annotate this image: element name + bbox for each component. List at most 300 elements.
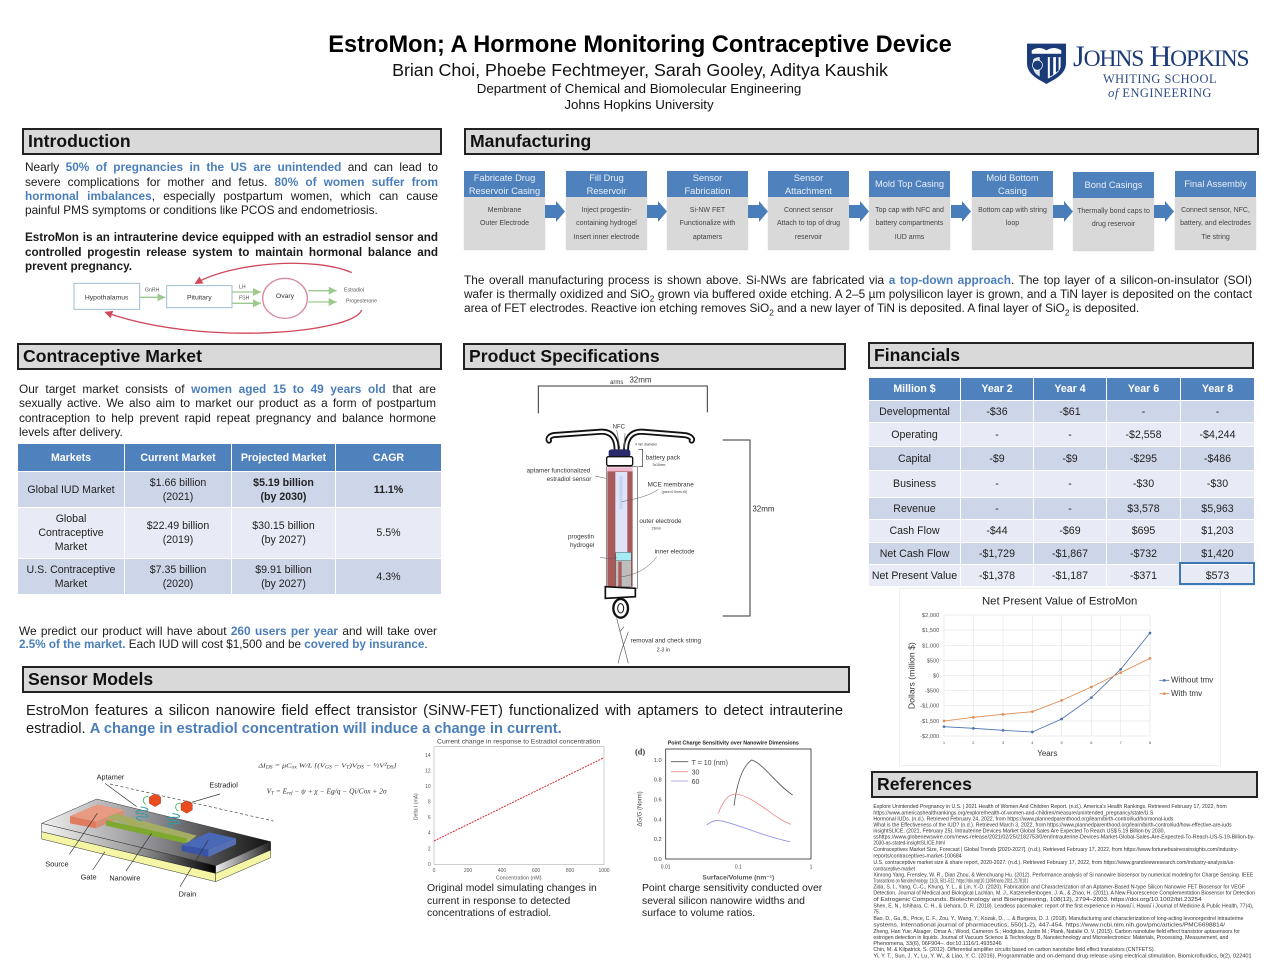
equations: T xyxy=(346,766,350,771)
market table: Global xyxy=(56,513,86,525)
heading: contraceptive market xyxy=(17,343,442,370)
diagram: IUD device: 4 mm diameter xyxy=(635,443,658,447)
financial table: - xyxy=(1216,406,1219,418)
step 6: Casing xyxy=(998,186,1027,196)
market table: CAGR xyxy=(373,452,404,464)
financial table: Net Cash Flow xyxy=(880,548,949,560)
market table: 11.1% xyxy=(374,484,403,496)
line chart: net present value: 1 xyxy=(943,740,946,745)
line chart: net present value: $500 xyxy=(927,658,939,664)
equations: DS xyxy=(265,766,273,771)
financial table: $1,420 xyxy=(1201,548,1234,560)
financial table: -$30 xyxy=(1133,478,1154,490)
chart: hormone feedback diagram: Hypothalamus xyxy=(85,294,129,301)
diagram: IUD device: NFC xyxy=(613,424,626,430)
text block: introduction paragraph: painful PMS symptoms or conditions like PCOS and endometriosis. xyxy=(25,203,378,217)
step 4: Attach to top of drug xyxy=(777,220,840,227)
heading: manufacturing: Manufacturing xyxy=(470,131,591,151)
text block: reference list xyxy=(873,804,1255,959)
diagram: IUD device: 3x10mm xyxy=(653,463,666,467)
step 4 xyxy=(767,171,850,250)
diagram: IUD device: outer electrode xyxy=(639,518,682,525)
financial table: - xyxy=(1142,406,1145,418)
diagram: nanowire FET: Drain xyxy=(179,890,196,899)
line chart: net present value: Without tmv xyxy=(1171,676,1213,685)
text block: target market: Our target market consists of women aged 15 to 49 years old that are xyxy=(19,382,436,396)
diagram: nanowire FET: Estradiol xyxy=(209,780,238,789)
arrow xyxy=(647,201,667,222)
caption: model chart: Original model simulating changes in xyxy=(427,883,597,894)
icon: university shield xyxy=(1027,44,1066,84)
market table: (2021) xyxy=(163,490,193,502)
line chart: current change vs concentration: Current change in response to Estradiol concentration xyxy=(437,739,600,746)
financial table: $695 xyxy=(1132,525,1155,537)
line chart: current change vs concentration: 200 xyxy=(464,868,472,874)
market table: (by 2030) xyxy=(261,490,306,502)
text block: market prediction: 2.5% of the market. Each IUD will cost $1,500 and be covered by insurance. xyxy=(19,638,428,651)
line chart: current change vs concentration: 8 xyxy=(428,799,431,805)
line chart: net present value: 7 xyxy=(1120,740,1123,745)
text block: introduction paragraph: hormonal imbalances, especially postpartum women, which can cause xyxy=(25,189,438,203)
financial table: Cash Flow xyxy=(889,525,940,537)
step 8: Tie string xyxy=(1201,234,1230,241)
arrow xyxy=(849,201,869,222)
callout: final NPV highlight xyxy=(1179,562,1255,585)
diagram: IUD device: battery pack xyxy=(646,454,681,461)
line chart: point charge sensitivity xyxy=(635,740,813,882)
text block: target market xyxy=(19,382,436,438)
financial table: -$30 xyxy=(1207,478,1228,490)
financial table: -$44 xyxy=(986,525,1008,537)
financial table: -$4,244 xyxy=(1200,428,1235,440)
panel: manufacturing xyxy=(464,128,1259,317)
heading: introduction: Introduction xyxy=(28,131,131,151)
text block: reference list: Bao, D., Gu, B., Price, C. F., Zou, Y., Wang, Y., Kozak, D., ... & Burgess, D. J. (2018). Manufacturing and characterization of long-acting levonorgestrel intrauterine xyxy=(873,916,1243,922)
line chart: point charge sensitivity: Surface/Volume (nm⁻¹) xyxy=(702,875,774,882)
logo: Johns Hopkins Whiting School of Engineering xyxy=(1027,40,1248,100)
line chart: point charge sensitivity: 30 xyxy=(692,769,700,776)
financial table: -$1,867 xyxy=(1052,548,1088,560)
caption: model chart: current in response to detected xyxy=(427,896,570,907)
text block: reference list: Phenomena, 33(6), 06F904–. doi:10.1116/1.4935246 xyxy=(873,941,1002,947)
step 1: Reservoir Casing xyxy=(469,186,540,196)
diagram: IUD device: progestin xyxy=(568,534,595,541)
line chart: current change vs concentration: Concentration (nM) xyxy=(496,876,542,882)
text block: reference list: Transactions on Nanotechnology, 11(3), 501–512. https://doi.org/10.1109/tnano.2011.2178101 xyxy=(873,879,1028,885)
text block: reference list: 75. xyxy=(873,909,880,915)
text block: device summary: prevent pregnancy. xyxy=(25,260,132,273)
arrow xyxy=(748,201,768,222)
financial table: -$732 xyxy=(1130,548,1157,560)
financial table: -$371 xyxy=(1130,570,1157,582)
financial table: Net Present Value xyxy=(872,570,957,582)
text block: reference list: Zheng, Han Yue; Alsager, Omar A.; Wood, Cameron S.; Hodgkiss, Justin M.; Plank, Natalie O. V. (2015). Carbon nanotube field effect transistor aptasensors for xyxy=(873,929,1240,935)
market table: (by 2027) xyxy=(261,534,306,546)
affiliation: Department of Chemical and Biomolecular Engineering xyxy=(477,80,801,96)
financial table: $573 xyxy=(1206,570,1229,582)
diagram: IUD device: hydrogel xyxy=(570,542,594,549)
panel: contraceptive market xyxy=(17,343,442,651)
line chart: point charge sensitivity: 1 xyxy=(810,865,813,871)
equations: ΔI xyxy=(258,763,264,770)
diagram: IUD device: aptamer functionalized xyxy=(527,468,591,475)
text block: reference list: Contraceptives Market Size, Forecast | Global Trends [2020-2027]. (n.d.). Retrieved February 17, 2022, from https://www.fortunebusinessinsights.com/industry- xyxy=(873,847,1239,853)
step 1: Outer Electrode xyxy=(480,220,529,227)
text block: reference list: systems. International journal of pharmaceutics, 550(1-2), 447-454. https://www.ncbi.nlm.nih.gov/pmc/articles/PMC6698814/ xyxy=(873,922,1226,928)
text block: sensor description: estradiol. A change in estradiol concentration will induce a change in current. xyxy=(26,721,562,737)
panel: sensor models: Delta I (mA) xyxy=(413,793,419,820)
market table: $22.49 billion xyxy=(147,520,209,532)
chart: hormone feedback diagram: Pituitary xyxy=(187,294,212,301)
market table: $7.35 billion xyxy=(150,564,206,576)
authors: Brian Choi, Phoebe Fechtmeyer, Sarah Gooley, Aditya Kaushik xyxy=(392,60,888,80)
financial table: - xyxy=(995,502,999,514)
line chart: point charge sensitivity: 0.1 xyxy=(735,865,742,871)
line chart: current change vs concentration: 4 xyxy=(428,831,431,837)
text block: reference list: estrogen detection in liquids. Journal of Vacuum Science & Technology B, Nanotechnology and Microelectronics: Materials, Processing, Measurement, and xyxy=(873,935,1228,941)
heading: financials xyxy=(868,342,1254,369)
market table: Current Market xyxy=(140,452,216,464)
panel: sensor models xyxy=(22,666,850,919)
step 2: containing hydrogel xyxy=(576,220,637,227)
text block: reference list: What is the Effectiveness of the IUD? (n.d.). Retrieved March 3, 2022, from https://www.plannedparenthood.org/learn/birth-control/iud/how-effective-are-iuds xyxy=(873,823,1232,829)
step 5 xyxy=(868,171,950,250)
step 2 xyxy=(566,171,648,250)
panel: product specifications xyxy=(463,343,846,664)
diagram: nanowire FET: Gate xyxy=(81,872,97,881)
caption: sensitivity chart: Point charge sensitivity conducted over xyxy=(642,883,822,894)
chart: hormone feedback diagram: LH xyxy=(239,284,246,290)
heading: references: References xyxy=(877,774,972,794)
text block: target market: levels after delivery. xyxy=(19,424,123,438)
affiliation xyxy=(477,80,801,112)
market table: $30.15 billion xyxy=(252,520,315,532)
financial table: Operating xyxy=(891,428,938,440)
line chart: net present value: 6 xyxy=(1090,740,1093,745)
market table: 5.5% xyxy=(376,527,401,539)
market table: (2019) xyxy=(163,534,193,546)
financial table: -$69 xyxy=(1059,525,1081,537)
line chart: net present value: 5 xyxy=(1061,740,1064,745)
line chart: net present value: -$2,000 xyxy=(920,734,939,740)
step 8: Final Assembly xyxy=(1184,179,1247,189)
line chart: net present value: $1,500 xyxy=(922,628,939,634)
arrow xyxy=(1154,201,1174,222)
chart: hormone feedback diagram xyxy=(74,262,377,334)
financial table: -$9 xyxy=(1062,452,1078,464)
line chart: point charge sensitivity: 0.8 xyxy=(654,778,662,784)
financial table: - xyxy=(1068,428,1072,440)
line chart: net present value: Dollars (million $) xyxy=(907,642,917,709)
text block: reference list: Zida, S. I., Yang, C.-C., Khung, Y. L., & Lin, Y.-D. (2020). Fabrication and Characterization of an Aptamer-Based N-type Silicon Nanowire FET Biosensor for VEGF xyxy=(873,885,1246,891)
step 7 xyxy=(1072,172,1154,252)
step 2: Inject progestin- xyxy=(582,207,631,214)
diagram: IUD device: removal and check string xyxy=(631,638,701,645)
step 5: IUD arms xyxy=(895,234,924,241)
financial table: Business xyxy=(893,478,936,490)
financial table: $3,578 xyxy=(1127,502,1160,514)
chart: hormone feedback diagram: Progesterone xyxy=(346,299,377,305)
line chart: net present value: Net Present Value of EstroMon xyxy=(982,595,1137,607)
text block: device summary xyxy=(25,231,438,273)
line chart: current change vs concentration: 6 xyxy=(428,815,431,821)
caption: sensitivity chart xyxy=(642,883,822,919)
market table: $9.91 billion xyxy=(255,564,312,576)
line chart: current change vs concentration: 800 xyxy=(566,868,574,874)
line chart: point charge sensitivity: (d) xyxy=(635,747,645,756)
text block: market prediction xyxy=(19,624,437,651)
text block: reference list: Hormonal IUDs. (n.d.). Retrieved February 24, 2022, from https://www.plannedparenthood.org/learn/birth-control/iud/hormonal-iuds xyxy=(873,817,1174,823)
equations: ref xyxy=(287,791,293,796)
diagram: IUD device: 32mm xyxy=(629,376,652,385)
financial table: Year 6 xyxy=(1128,383,1159,395)
line chart: net present value: 3 xyxy=(1002,740,1005,745)
arrow xyxy=(1053,201,1073,222)
equations: − ψ + χ − Eg/q − Qi/Cox + 2σ xyxy=(292,787,387,795)
line chart: point charge sensitivity: T = 10 (nm) xyxy=(692,760,728,767)
market table: Contraceptive xyxy=(38,527,104,539)
diagram: IUD device xyxy=(526,376,775,664)
market table: U.S. Contraceptive xyxy=(27,564,115,576)
financial table: Million $ xyxy=(893,383,936,395)
text block: market prediction: We predict our product will have about 260 users per year and will take over xyxy=(19,624,437,638)
line chart: net present value: -$1,000 xyxy=(920,704,939,710)
text block: introduction paragraph: Nearly 50% of pregnancies in the US are unintended and can lead to xyxy=(25,160,438,174)
equations: = E xyxy=(274,787,288,795)
affiliation: Johns Hopkins University xyxy=(564,96,714,112)
financial table: -$486 xyxy=(1204,452,1231,464)
text block: reference list: https://www.americashealthrankings.org/explore/health-of-women-and-children/measure/unintended_pregnancy/state/U.S xyxy=(873,810,1154,816)
process flow xyxy=(464,171,1256,252)
equations: − ½V² xyxy=(364,763,388,770)
line chart: current change vs concentration: 0 xyxy=(428,862,431,868)
heading: financials: Financials xyxy=(874,345,960,365)
heading: contraceptive market: Contraceptive Market xyxy=(23,346,202,366)
financial table: $5,963 xyxy=(1201,502,1234,514)
text block: introduction paragraph: severe complications for mother and fetus. 80% of women suffer from xyxy=(25,174,438,188)
text block: device summary: EstroMon is an intrauterine device equipped with an estradiol sensor and xyxy=(25,231,438,244)
heading: manufacturing xyxy=(464,128,1259,155)
caption: model chart: concentrations of estradiol. xyxy=(427,908,551,919)
line chart: net present value: 2 xyxy=(972,740,975,745)
arrow xyxy=(951,201,971,222)
step 8 xyxy=(1174,171,1256,250)
market table: Projected Market xyxy=(241,452,326,464)
financial table: -$1,187 xyxy=(1052,570,1088,582)
equations: ox xyxy=(292,766,298,771)
text block: reference list: insightSLICE. (2021, February 25). Intrauterine Devices Market Global Sales Are Expected To Reach US$ 5.19 Billion by 2030, xyxy=(873,829,1165,835)
step 3: Functionalize with xyxy=(680,220,735,227)
panel: introduction xyxy=(22,128,442,334)
financial table: -$1,729 xyxy=(979,548,1015,560)
diagram: IUD device: 23mm xyxy=(652,527,661,531)
heading: introduction xyxy=(22,128,442,155)
market table: 4.3% xyxy=(376,570,401,582)
text block: manufacturing process: The overall manufacturing process is shown above. Si-NWs are fabricated via a top-down approach. The top layer of a silicon-on-insulator (SOI) xyxy=(464,273,1252,287)
financial table: -$1,378 xyxy=(979,570,1015,582)
step 6: loop xyxy=(1006,220,1019,227)
financial table: Revenue xyxy=(893,502,936,514)
step 3 xyxy=(666,171,748,250)
line chart: current change vs concentration xyxy=(413,739,610,882)
text block: target market: sexually active. We also aim to market our product as a form of postpartum xyxy=(19,396,436,410)
diagram: IUD device: (pore=0.5mm x5) xyxy=(662,490,687,494)
text block: reference list: Xinrong Yang, Frensley, W. R., Dian Zhou, & Wenchuang Hu. (2012). Performance analysis of Si nanowire biosensor by numerical modeling for Charge Sensing. IEEE xyxy=(873,873,1254,879)
logo school name: of ENGINEERING xyxy=(1108,86,1212,100)
financial table: - xyxy=(1068,478,1072,490)
step 3: Fabrication xyxy=(684,186,730,196)
step 4: Attachment xyxy=(785,186,832,196)
financial table: - xyxy=(995,428,999,440)
line chart: point charge sensitivity: 0.2 xyxy=(654,837,662,843)
step 6 xyxy=(972,171,1054,250)
title: EstroMon; A Hormone Monitoring Contraceptive Device xyxy=(328,32,952,58)
financial table: Year 2 xyxy=(981,383,1013,395)
diagram: nanowire FET: Nanowire xyxy=(109,873,140,882)
diagram: IUD device: estradiol sensor xyxy=(547,476,591,483)
financial table xyxy=(869,378,1254,586)
financial table: Year 4 xyxy=(1054,383,1086,395)
heading: product specifications: Product Specifications xyxy=(469,346,660,366)
financial table: $1,203 xyxy=(1201,525,1234,537)
chart: hormone feedback diagram: Estradiol xyxy=(344,287,364,293)
market table: (by 2027) xyxy=(261,578,306,590)
equations: = μC xyxy=(273,763,292,770)
diagram: IUD device: arms xyxy=(610,380,623,386)
line chart: net present value: 4 xyxy=(1031,740,1034,745)
step 1: Membrane xyxy=(488,207,521,214)
text block: reference list: Detection. Journal of Medical and Biological Lachlan, M. J., Katzenellenbogen, J. A., & Zhao, H. (2011). A New Fluorescence Complementation Biosensor for Detection xyxy=(873,891,1255,897)
market table xyxy=(18,444,441,594)
step 2: Fill Drug xyxy=(589,173,624,183)
step 3: Si-NW FET xyxy=(690,207,725,214)
market table: Markets xyxy=(51,452,91,464)
caption: model chart xyxy=(427,883,597,919)
line chart: net present value: -$1,500 xyxy=(920,719,939,725)
text block: sensor description: EstroMon features a silicon nanowire field effect transistor (SiNW-FET) functionalized with aptamers to detect intrauterine xyxy=(26,703,843,719)
step 5: battery compartments xyxy=(876,220,943,227)
line chart: current change vs concentration: 14 xyxy=(425,753,431,759)
line chart: point charge sensitivity: 60 xyxy=(692,779,700,786)
line chart: net present value xyxy=(899,588,1221,766)
line chart: net present value: $2,000 xyxy=(922,613,939,619)
logo school name: WHITING SCHOOL xyxy=(1103,72,1217,86)
line chart: net present value: 8 xyxy=(1149,740,1152,745)
text block: reference list: U.S. contraceptive market size & share report, 2020-2027. (n.d.). Retrieved February 17, 2022, from https://www.grandviewresearch.com/industry-analysis/us- xyxy=(873,860,1235,866)
financial table: -$9 xyxy=(989,452,1005,464)
financial table: - xyxy=(995,478,999,490)
line chart: current change vs concentration: 10 xyxy=(425,784,431,790)
chart: hormone feedback diagram: FSH xyxy=(239,296,250,302)
caption: sensitivity chart: surface to volume ratios. xyxy=(642,908,755,919)
diagram: IUD device: 32mm xyxy=(752,504,775,513)
equations xyxy=(258,762,397,796)
step 5: Top cap with NFC and xyxy=(875,207,944,214)
equations: V xyxy=(267,787,271,795)
line chart: point charge sensitivity: 0.4 xyxy=(654,817,662,823)
step 8: Connect sensor, NFC, xyxy=(1181,207,1250,214)
line chart: net present value: With tmv xyxy=(1171,689,1202,698)
text block: reference list: contraceptive-market xyxy=(873,866,915,872)
chart: hormone feedback diagram: GnRH xyxy=(145,288,160,294)
text block: reference list: Yi, Y. T., Sun, J. Y., Lu, Y. W., & Liao, Y. C. (2016). Programmable and on-demand drug release using electrical stimulation. Biomicrofluidics, 9(2), 022401 xyxy=(873,953,1252,959)
text block: target market: contraception to help prevent rapid repeat pregnancy and balance hormone xyxy=(19,410,436,424)
step 4: Sensor xyxy=(794,173,823,183)
text block: reference list: sshttps://www.globenewswire.com/news-release/2021/02/25/2182753/0/en/Intrauterine-Devices-Market-Global-Sales-Are-Expected-To-Reach-US-5-19-Billion-by- xyxy=(873,835,1255,841)
text block: manufacturing process: area of FET electrodes. Reactive ion etching removes SiO2 and a new layer of TiN is deposited. A final layer of SiO2 is deposited. xyxy=(464,301,1139,317)
text block: introduction paragraph xyxy=(25,160,438,217)
diagram: IUD device: inner electode xyxy=(655,549,695,556)
market table: Market xyxy=(55,541,87,553)
heading: sensor models: Sensor Models xyxy=(28,669,153,689)
heading: sensor models xyxy=(22,666,850,693)
heading: product specifications xyxy=(463,343,846,370)
text block: reference list: of Estrogenic Compounds. Biotechnology and Bioengineering, 108(12), 2794–2803. https://doi.org/10.1002/bit.23254 xyxy=(873,897,1202,903)
line chart: point charge sensitivity: ΔG/G (Norm) xyxy=(638,791,644,827)
text block: device summary: controlled progestin release system to maintain hormonal balance and xyxy=(25,246,438,258)
text block: reference list: Chin, M. & Kilpatrick, S. (2012). Differential amplifier circuits based on carbon nanotube field effect transistors (CNTFETS). xyxy=(873,947,1155,953)
text block: sensor description xyxy=(26,703,843,737)
line chart: net present value: -$500 xyxy=(925,689,939,695)
logo wordmark: JOHNS HOPKINS xyxy=(1073,40,1248,73)
financial table: Developmental xyxy=(879,406,950,418)
step 8: battery, and electrodes xyxy=(1180,220,1251,227)
step 5: Mold Top Casing xyxy=(875,179,944,189)
panel: financials xyxy=(868,342,1255,766)
line chart: net present value: $0 xyxy=(933,673,939,679)
market table: $1.66 billion xyxy=(150,476,206,488)
step 1 xyxy=(464,171,546,250)
step 7: Thermally bond caps to xyxy=(1077,208,1150,215)
market table: Global IUD Market xyxy=(27,484,115,496)
diagram: nanowire FET: Source xyxy=(45,860,69,869)
line chart: point charge sensitivity: 0.6 xyxy=(654,797,662,803)
financial table: -$295 xyxy=(1130,452,1157,464)
chart: hormone feedback diagram: Ovary xyxy=(276,293,295,300)
logo school name xyxy=(1103,72,1217,100)
equations: DS xyxy=(385,766,394,771)
financial table: Year 8 xyxy=(1202,383,1233,395)
step 3: Sensor xyxy=(693,173,722,183)
line chart: point charge sensitivity: 0.01 xyxy=(661,865,671,871)
line chart: current change vs concentration: 600 xyxy=(532,868,540,874)
diagram: nanowire FET: Aptamer xyxy=(97,773,125,782)
equations: − V xyxy=(332,763,347,770)
step 4: reservoir xyxy=(795,234,822,241)
step 2: Reservoir xyxy=(587,186,626,196)
arrow xyxy=(545,201,565,222)
diagram: nanowire FET xyxy=(41,773,274,899)
text block: manufacturing process xyxy=(464,273,1252,317)
step 6: Bottom cap with string xyxy=(978,207,1047,214)
step 6: Mold Bottom xyxy=(986,173,1039,183)
text block: reference list: Explore Unintended Pregnancy in U.S. | 2021 Health of Women And Children Report. (n.d.). America's Health Rankings. Retrieved February 17, 2022, from xyxy=(873,804,1227,810)
step 1: Fabricate Drug xyxy=(474,173,535,183)
step 3: aptamers xyxy=(693,234,722,241)
heading: references xyxy=(871,771,1258,798)
step 4: Connect sensor xyxy=(784,207,833,214)
line chart: point charge sensitivity: 1.0 xyxy=(654,758,662,764)
step 7: drug reservoir xyxy=(1092,221,1135,228)
line chart: current change vs concentration: 2 xyxy=(428,846,431,852)
caption: sensitivity chart: several silicon nanowire widths and xyxy=(642,896,805,907)
equations: W/L [(V xyxy=(297,763,326,770)
market table: $5.19 billion xyxy=(253,476,314,488)
text block: reference list: 2030-as-stated-insightSLICE.html xyxy=(873,841,945,847)
line chart: current change vs concentration: 400 xyxy=(498,868,506,874)
equations: T xyxy=(271,791,274,796)
step 7: Bond Casings xyxy=(1085,180,1142,190)
